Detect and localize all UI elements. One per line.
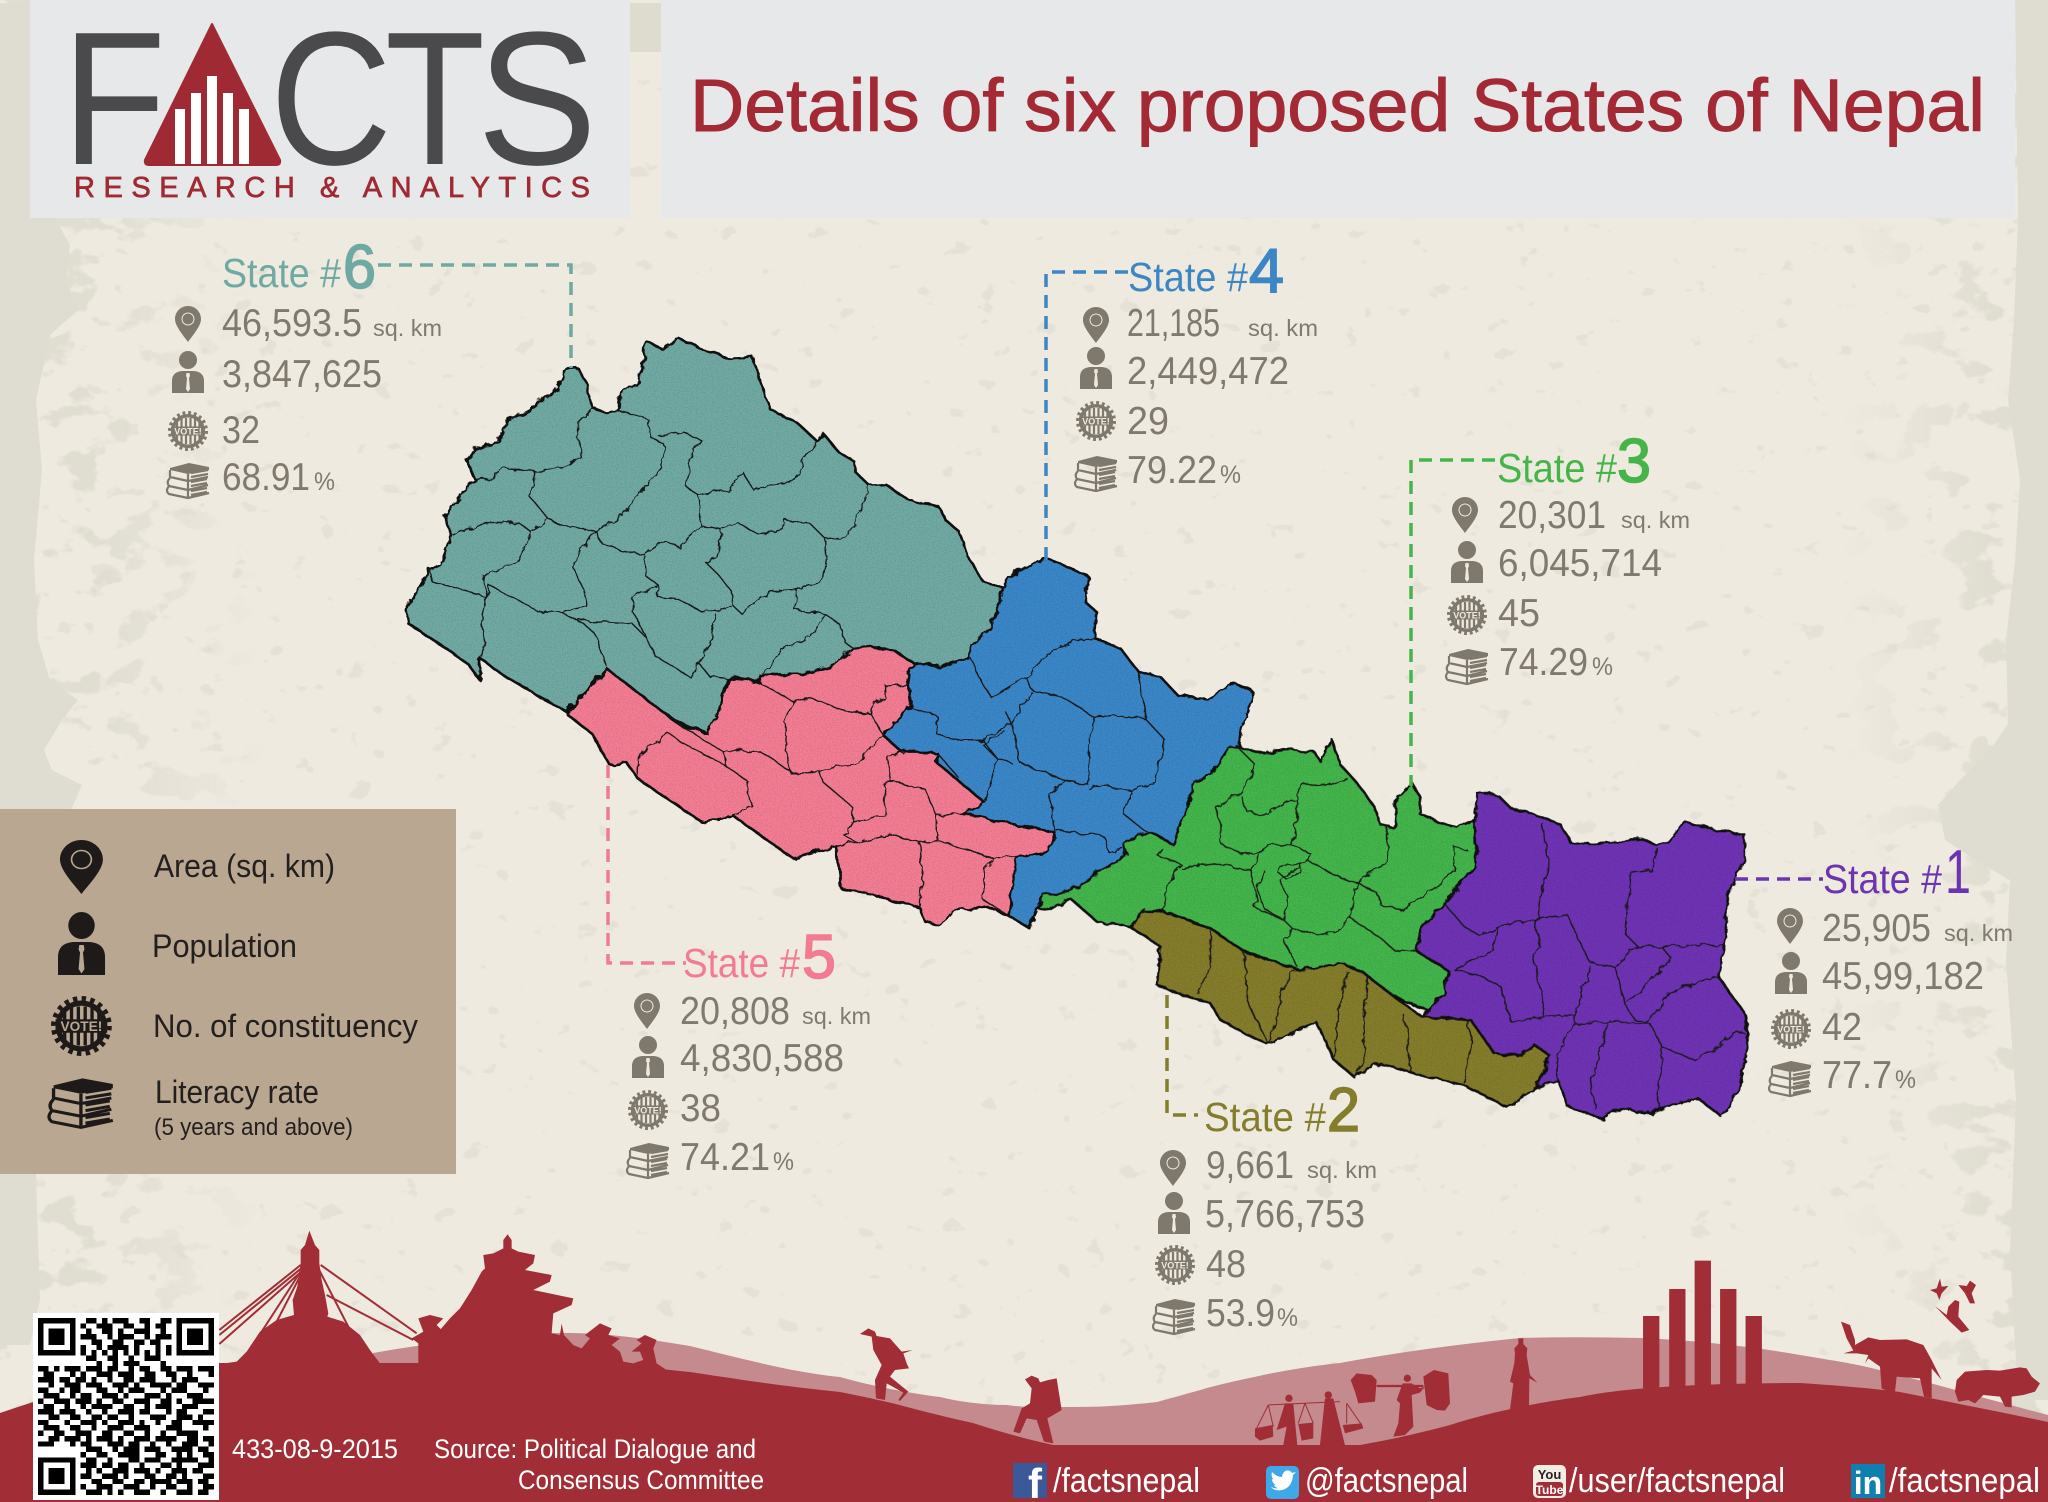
social: youtube: /user/factsnepal [1569,1462,1785,1500]
callout: State 6 [167,233,571,499]
callout: State 6: 32 [222,409,260,452]
callout: State 4: 21,185 [1127,302,1220,345]
callout: State 4: 29 [1127,400,1169,443]
callout: State 1: State # [1823,856,1942,902]
callout: State 4: 4 [1249,237,1284,306]
chart bars silhouette [1643,1261,1762,1390]
callout: State 2: % [1277,1304,1298,1332]
front hill [0,1361,2048,1502]
callout: State 3: 20,301 [1498,494,1606,537]
callout: State 6: State # [222,250,341,296]
footer source [434,1434,764,1495]
callout: State 2: 5,766,753 [1205,1193,1365,1236]
callout: State 1: sq. km [1944,920,2013,946]
social: youtube: You [1538,1467,1561,1482]
footer source: Source: Political Dialogue and [434,1434,756,1464]
callout: State 1: 42 [1822,1006,1862,1049]
callout: State 3 [1411,427,1690,786]
silhouette: elephant [1841,1322,1942,1398]
callout: State 4: % [1220,461,1241,489]
social: facebook [1013,1460,1200,1502]
callout: State 3: State # [1497,445,1617,491]
callout: State 2 [1153,995,1377,1335]
social: twitter: @factsnepal [1305,1462,1468,1500]
callout: State 5: 4,830,588 [680,1037,844,1080]
callout: State 1: 25,905 [1822,907,1931,950]
header panel: logo [30,0,630,218]
title: Details of six proposed States of Nepal [690,64,1985,147]
callout: State 1: % [1895,1066,1916,1094]
logo triangle with bars [145,24,280,165]
legend: literacy: (5 years and above) [154,1114,353,1141]
callout: State 5: 38 [680,1087,721,1130]
silhouette: porter [1013,1376,1062,1443]
legend: constituency: No. of constituency [153,1008,418,1044]
social: facebook: /factsnepal [1053,1462,1200,1500]
social: youtube: Tube [1536,1483,1564,1497]
callout: State 5: sq. km [802,1003,871,1029]
callout: State 4: 79.22 [1127,449,1217,492]
callout: State 3: sq. km [1621,507,1690,533]
map of Nepal [406,338,1748,1120]
silhouette: rhino [1955,1367,2040,1407]
callout: State 6: 46,593.5 [222,302,362,345]
silhouette: pagoda temple [440,1234,667,1380]
callout: State 3: 3 [1617,427,1651,496]
callout: State 6: % [314,468,335,496]
callout: State 5 [608,765,871,1179]
legend: literacy: Literacy rate [155,1074,319,1110]
callout: State 1: 45,99,182 [1822,955,1984,998]
silhouette: basket carriers [1255,1391,1345,1445]
callout: State 5: 74.21 [680,1136,770,1179]
callout: State 3: % [1592,653,1613,681]
silhouette: basket [1347,1403,1362,1425]
callout: State 5: 5 [802,923,836,992]
callout: State 2: 2 [1327,1076,1360,1145]
callout: State 2: sq. km [1307,1157,1377,1183]
region: State 1 [1418,793,1748,1120]
callout: State 6: 6 [343,233,376,302]
region: State 6 [406,338,1003,733]
silhouette: woman with pot [1510,1338,1537,1410]
silhouette: walker [860,1328,913,1401]
region: State 2 [1130,910,1549,1107]
legend: population [58,912,297,975]
region: State 5 [567,646,1054,926]
callout: State 1: 77.7 [1822,1054,1892,1097]
region: State 3 [1037,740,1476,1010]
logo tagline: RESEARCH & ANALYTICS [74,172,590,204]
callout: State 4: 2,449,472 [1127,350,1289,393]
callout: State 6: 3,847,625 [222,353,382,396]
region: State 4 [882,559,1252,928]
social: linkedin: in [1854,1465,1882,1501]
callout: State 4: sq. km [1248,315,1318,341]
callout: State 4 [1046,237,1318,560]
callout: State 2: 9,661 [1206,1144,1294,1187]
callout: State 2: State # [1204,1094,1326,1140]
silhouette: small shrine [412,1315,448,1370]
legend panel [0,809,456,1174]
footer reference number: 433-08-9-2015 [232,1434,398,1464]
callout: State 6: sq. km [373,315,442,341]
callout: State 3: 45 [1498,592,1540,635]
callout: State 2: 53.9 [1206,1292,1275,1335]
header panel: title [661,0,2015,218]
callout: State 5: State # [683,940,800,986]
callout: State 3: 6,045,714 [1498,542,1662,585]
callout: State 5: 20,808 [680,990,790,1033]
footer landscape [0,1231,2048,1502]
back hill [373,1333,2048,1460]
QR code [33,1313,219,1500]
callout: State 1 [1735,838,2013,1097]
legend: population: Population [152,928,297,964]
silhouette: birds [1930,1278,1976,1333]
legend: area [60,840,335,894]
callout: State 6: 68.91 [222,456,310,499]
silhouette: carrier with bundles [1351,1370,1450,1437]
callout: State 2: 48 [1206,1243,1246,1286]
legend: literacy [49,1074,353,1141]
logo wordmark [62,0,597,205]
callout: State 4: State # [1128,254,1248,300]
callout: State 3: 74.29 [1499,641,1588,684]
legend: area: Area (sq. km) [154,848,335,884]
silhouette: stupa [219,1231,417,1370]
footer source: Consensus Committee [518,1465,764,1495]
callout: State 5: % [773,1148,794,1176]
legend: constituency [54,999,418,1053]
callout: State 1: 1 [1945,838,1971,907]
